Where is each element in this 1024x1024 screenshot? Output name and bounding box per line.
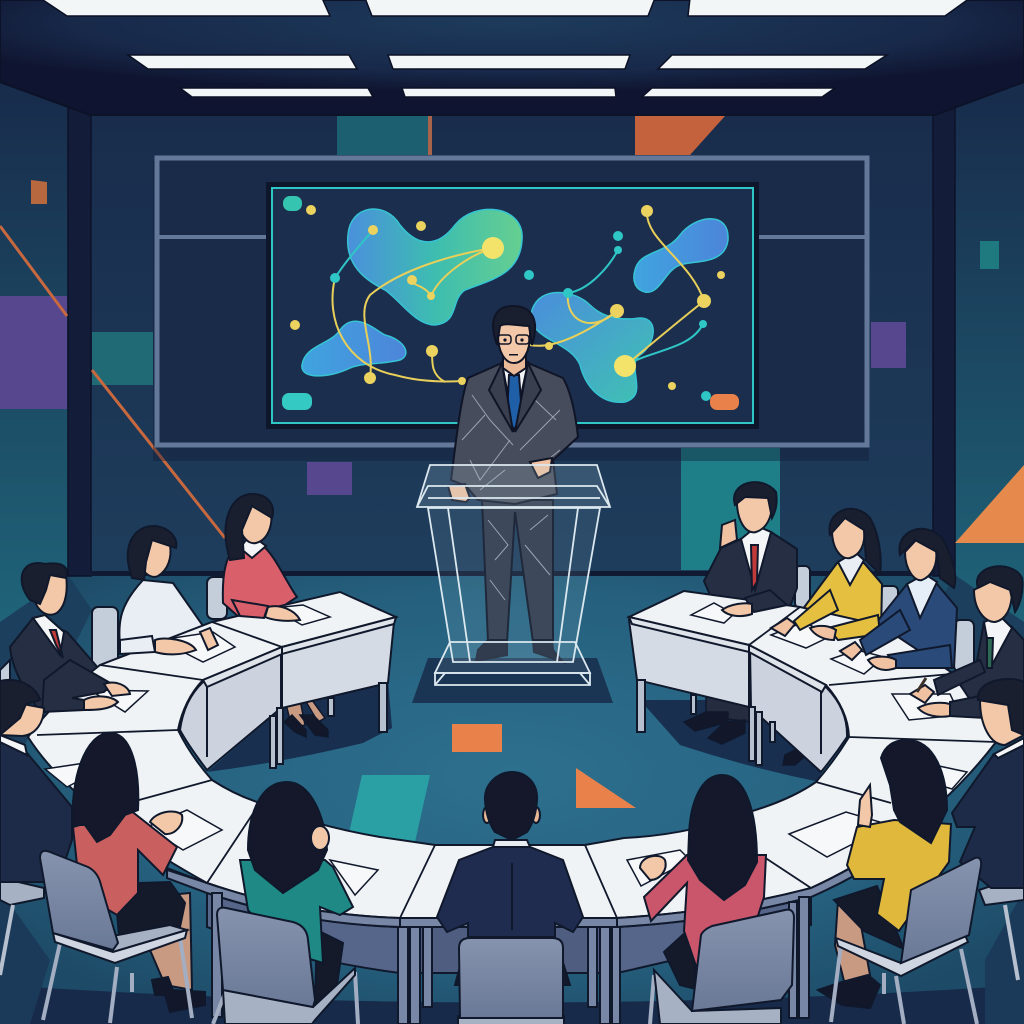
person: dark suit red tie — [704, 482, 797, 618]
network nodes — [290, 205, 725, 390]
foreground attendee: teal top — [240, 782, 353, 1005]
table legs — [270, 680, 775, 768]
table top edge bands — [167, 868, 400, 927]
ceiling lights — [40, 0, 970, 97]
table outer faces — [207, 893, 400, 973]
speaker — [448, 306, 578, 662]
foreground chair: left — [40, 851, 192, 1023]
table inner faces — [282, 622, 394, 708]
blob: top right — [634, 219, 728, 292]
back-row attendees right — [704, 482, 1024, 724]
wall skirting — [90, 571, 935, 576]
person: dark suit red tie — [10, 563, 112, 712]
glass podium — [417, 465, 610, 685]
ceiling — [0, 0, 1024, 115]
legs and shoes under right table — [684, 690, 810, 765]
foreground attendee: yellow top — [818, 740, 951, 1008]
head — [503, 350, 526, 376]
arms: dark suit left — [42, 660, 112, 712]
back-row chairs — [0, 566, 974, 690]
legs and shoes under left table — [284, 700, 328, 737]
round table — [28, 591, 996, 973]
data screen — [266, 182, 759, 429]
suit pattern — [462, 395, 560, 600]
speaker platform — [412, 658, 613, 703]
arms: pink sweater — [232, 600, 268, 618]
side chair: left — [0, 830, 44, 975]
arms: dark suit right — [745, 590, 787, 612]
foreground chair: centre — [458, 938, 564, 1024]
foreground attendee: rose top — [640, 775, 766, 990]
floor table shadows — [0, 575, 1024, 1024]
jacket — [451, 363, 578, 504]
foreground chair: centre right — [650, 910, 794, 1024]
foreground chair: centre left — [213, 908, 358, 1024]
wall display frame — [153, 158, 869, 461]
hands — [448, 484, 470, 502]
left side wall — [0, 82, 68, 622]
floor — [0, 570, 1024, 1024]
wall colour blocks — [0, 116, 1024, 570]
shirt and tie — [502, 363, 528, 428]
glasses — [498, 335, 529, 344]
network lines — [332, 211, 704, 382]
side chair: right — [979, 825, 1024, 980]
person: yellow sweater — [794, 509, 882, 638]
person: dark suit far right — [934, 566, 1024, 724]
back-row attendees left — [10, 494, 297, 712]
back-row arms and hands — [42, 590, 985, 718]
pen — [917, 678, 926, 692]
screen pills — [283, 196, 302, 211]
person: white blouse — [119, 526, 208, 652]
arms: dark suit far right — [934, 660, 985, 718]
attendee: far right side — [952, 679, 1024, 888]
blob: centre right — [531, 292, 653, 402]
table top — [28, 591, 996, 918]
notepads — [45, 603, 967, 895]
blob: lower left — [302, 321, 406, 376]
arms: yellow sweater — [794, 590, 880, 640]
trousers — [482, 500, 553, 642]
blob: top left — [348, 209, 522, 325]
right side wall — [955, 82, 1024, 622]
back wall — [90, 115, 935, 575]
arms: blue suit — [860, 610, 952, 668]
arms: white blouse — [120, 636, 155, 654]
floor dark outer band — [0, 985, 1024, 1024]
foreground attendee: dark suit — [437, 772, 583, 985]
table inner face seams — [207, 686, 821, 757]
person: pink sweater — [223, 494, 297, 618]
wall pillars — [68, 108, 955, 576]
attendee: far left side — [0, 680, 72, 882]
floor shapes — [347, 724, 636, 842]
table front legs — [212, 893, 809, 1024]
person: blue suit — [857, 529, 957, 668]
lapels — [489, 363, 541, 432]
eyes and mouth — [503, 338, 524, 356]
foreground attendee: pink top — [73, 733, 205, 1012]
table seams — [37, 607, 996, 918]
shoes — [476, 640, 563, 662]
foreground chair: right — [831, 858, 981, 1024]
